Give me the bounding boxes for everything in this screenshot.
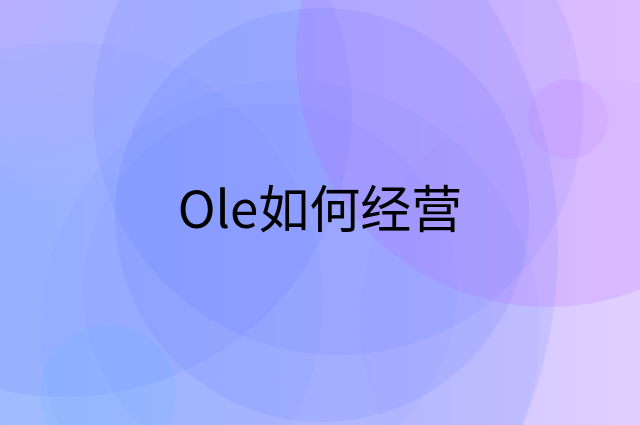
title: Ole如何经营	[178, 169, 462, 243]
